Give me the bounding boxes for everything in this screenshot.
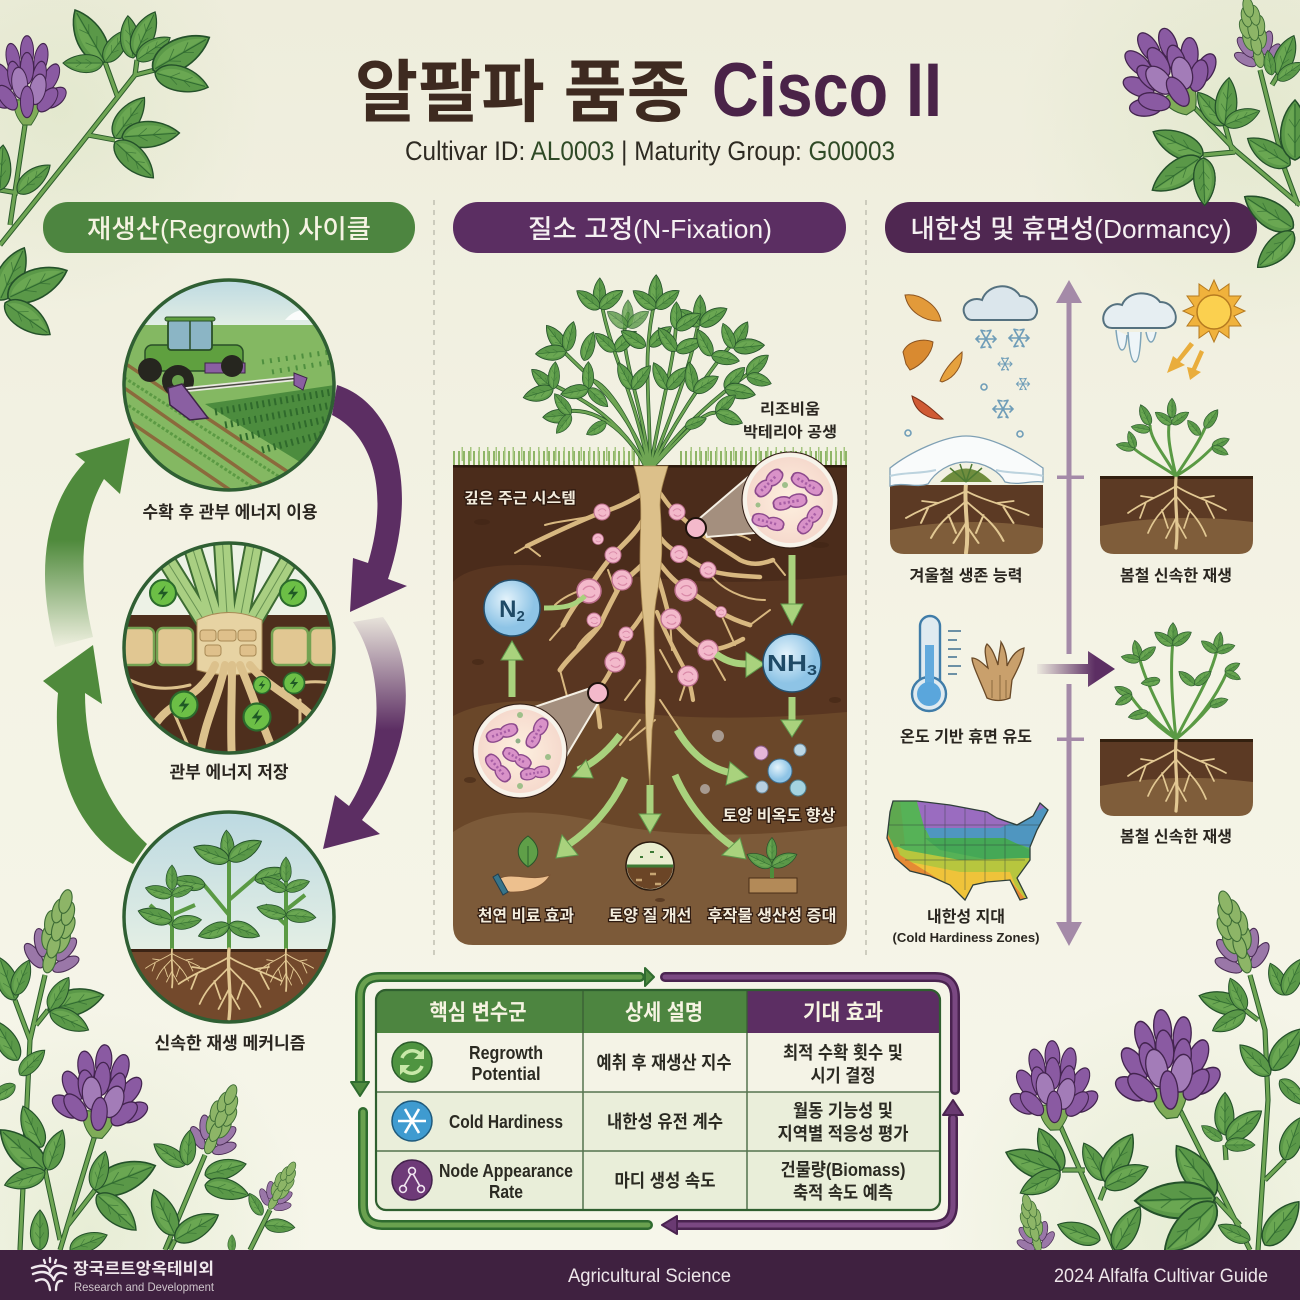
label: crown storage: 관부 에너지 저장 xyxy=(170,763,289,782)
panel: nitrogen fixation xyxy=(453,275,847,945)
title xyxy=(355,48,942,133)
map: hardiness zones xyxy=(886,800,1049,902)
molecule: N2 xyxy=(484,580,540,636)
icon: thermometer xyxy=(912,616,961,711)
decoration: top-right alfalfa xyxy=(1095,0,1300,276)
row: regrowth potential: Regrowth xyxy=(469,1043,543,1063)
nodules xyxy=(577,504,726,686)
icon: soil fertility bubbles xyxy=(700,730,806,796)
row: cold hardiness: 월동 기능성 및 xyxy=(793,1101,893,1121)
label: rhizobium: 리조비움 xyxy=(760,401,820,418)
label: rhizobium xyxy=(743,401,837,441)
organization name xyxy=(73,1260,215,1294)
label: soil quality: 토양 질 개선 xyxy=(608,907,692,925)
frame arrows around table xyxy=(351,968,963,1234)
callout: rhizobium zoom bottom xyxy=(473,683,608,798)
icons: autumn and snow xyxy=(903,286,1037,437)
arrowheads xyxy=(501,604,803,859)
label: temperature dormancy: 온도 기반 휴면 유도 xyxy=(900,728,1032,746)
heading: regrowth cycle: 재생산(Regrowth) 사이클 xyxy=(87,214,371,244)
icon: crown xyxy=(972,642,1024,700)
arrow: purple lower fading xyxy=(323,617,406,849)
row: cold hardiness: Cold Hardiness xyxy=(449,1112,563,1132)
table: key variables xyxy=(376,990,940,1210)
row: cold hardiness: 내한성 유전 계수 xyxy=(607,1112,723,1132)
label: deep taproot: 깊은 주근 시스템 xyxy=(464,490,576,507)
row: cold hardiness xyxy=(392,1101,909,1144)
scene: crown energy storage xyxy=(122,541,336,755)
icons: thaw cloud and sun xyxy=(1103,280,1245,380)
label: following crop: 후작물 생산성 증대 xyxy=(708,907,836,925)
table header xyxy=(376,990,940,1033)
footer right: 2024 Alfalfa Cultivar Guide xyxy=(1054,1266,1268,1287)
panel: dormancy xyxy=(885,280,1253,946)
callout: rhizobium zoom top xyxy=(686,452,838,548)
label: hardiness zones: 내한성 지대 xyxy=(927,908,1005,926)
scene: harvest xyxy=(120,278,340,495)
logo xyxy=(32,1258,66,1290)
title: Cisco II xyxy=(712,48,942,133)
label: soil fertility: 토양 비옥도 향상 xyxy=(722,807,836,825)
icon: hand with leaf xyxy=(493,836,550,895)
label: spring regrowth 1: 봄철 신속한 재생 xyxy=(1120,567,1232,585)
heading: dormancy xyxy=(885,202,1257,253)
organization name: Research and Development xyxy=(74,1280,215,1294)
icon: sprout xyxy=(744,838,799,893)
heading: nitrogen fixation: 질소 고정(N-Fixation) xyxy=(528,214,772,244)
label: regrowth: 신속한 재생 메커니즘 xyxy=(154,1034,306,1053)
row: node appearance rate: Node Appearance xyxy=(439,1161,573,1181)
header xyxy=(168,373,307,420)
row: regrowth potential: 최적 수확 횟수 및 xyxy=(783,1043,903,1063)
title: 알팔파 품종 xyxy=(355,55,690,131)
row: regrowth potential: 예취 후 재생산 지수 xyxy=(596,1053,732,1073)
molecule: NH3: 3 xyxy=(807,662,817,679)
subtitle: Cultivar ID: AL0003 | Maturity Group: G00003 xyxy=(405,136,895,166)
arrow: dormancy to regrowth xyxy=(1037,651,1115,687)
panel: regrowth cycle xyxy=(43,278,407,1053)
axis arrow xyxy=(1056,280,1084,946)
heading: dormancy: 내한성 및 휴면성(Dormancy) xyxy=(910,214,1232,244)
scene: winter soil and roots xyxy=(890,436,1043,555)
footer center: Agricultural Science xyxy=(568,1266,731,1287)
molecule: NH3 xyxy=(763,634,821,692)
molecule: NH3: NH xyxy=(767,650,800,676)
decoration: top-left alfalfa xyxy=(0,4,216,344)
arrows: flow xyxy=(512,555,792,848)
row: regrowth potential xyxy=(392,1042,903,1086)
scene: spring plant 2 xyxy=(1100,623,1253,819)
label: spring regrowth 2: 봄철 신속한 재생 xyxy=(1120,828,1232,846)
soil background xyxy=(453,464,847,945)
tractor xyxy=(138,317,245,397)
row: cold hardiness: 지역별 적응성 평가 xyxy=(778,1124,909,1144)
molecule: N2: 2 xyxy=(516,608,525,625)
arrow: green lower xyxy=(43,645,147,864)
plant: root system xyxy=(515,466,785,790)
table header: 핵심 변수군 xyxy=(430,1000,526,1025)
arrow: purple upper xyxy=(332,385,407,612)
label: winter survival: 겨울철 생존 능력 xyxy=(910,567,1022,585)
arrow: green upper fading xyxy=(45,438,130,647)
label: natural fertilizer: 천연 비료 효과 xyxy=(478,907,574,925)
scene: spring plant 1 xyxy=(1100,398,1253,556)
row: node appearance rate: Rate xyxy=(489,1182,523,1202)
row: node appearance rate: 축적 속도 예측 xyxy=(793,1183,893,1203)
row: node appearance rate: 건물량(Biomass) xyxy=(780,1160,906,1180)
row: regrowth potential: Potential xyxy=(472,1064,540,1084)
label: hardiness zones xyxy=(892,908,1040,945)
row: node appearance rate xyxy=(392,1160,906,1203)
molecule: N2: N xyxy=(499,596,516,623)
table header: 상세 설명 xyxy=(625,1000,703,1025)
plant: crown xyxy=(522,275,773,465)
label: rhizobium: 박테리아 공생 xyxy=(743,424,837,441)
label: hardiness zones: (Cold Hardiness Zones) xyxy=(892,930,1040,945)
decoration: bottom-left alfalfa xyxy=(0,882,312,1258)
row: regrowth potential: 시기 결정 xyxy=(810,1066,876,1086)
label: harvest: 수확 후 관부 에너지 이용 xyxy=(142,503,318,522)
heading: regrowth cycle xyxy=(43,202,415,253)
grass xyxy=(453,454,847,458)
organization name: 장국르트앙옥테비외 xyxy=(73,1260,214,1278)
table header: 기대 효과 xyxy=(803,1000,883,1025)
scene: regrowth plants xyxy=(120,810,340,1024)
footer xyxy=(0,1250,1300,1300)
heading: nitrogen fixation xyxy=(453,202,846,253)
icon: soil quality xyxy=(626,842,674,890)
row: node appearance rate: 마디 생성 속도 xyxy=(614,1171,716,1191)
decoration: bottom-right alfalfa xyxy=(1001,881,1300,1264)
